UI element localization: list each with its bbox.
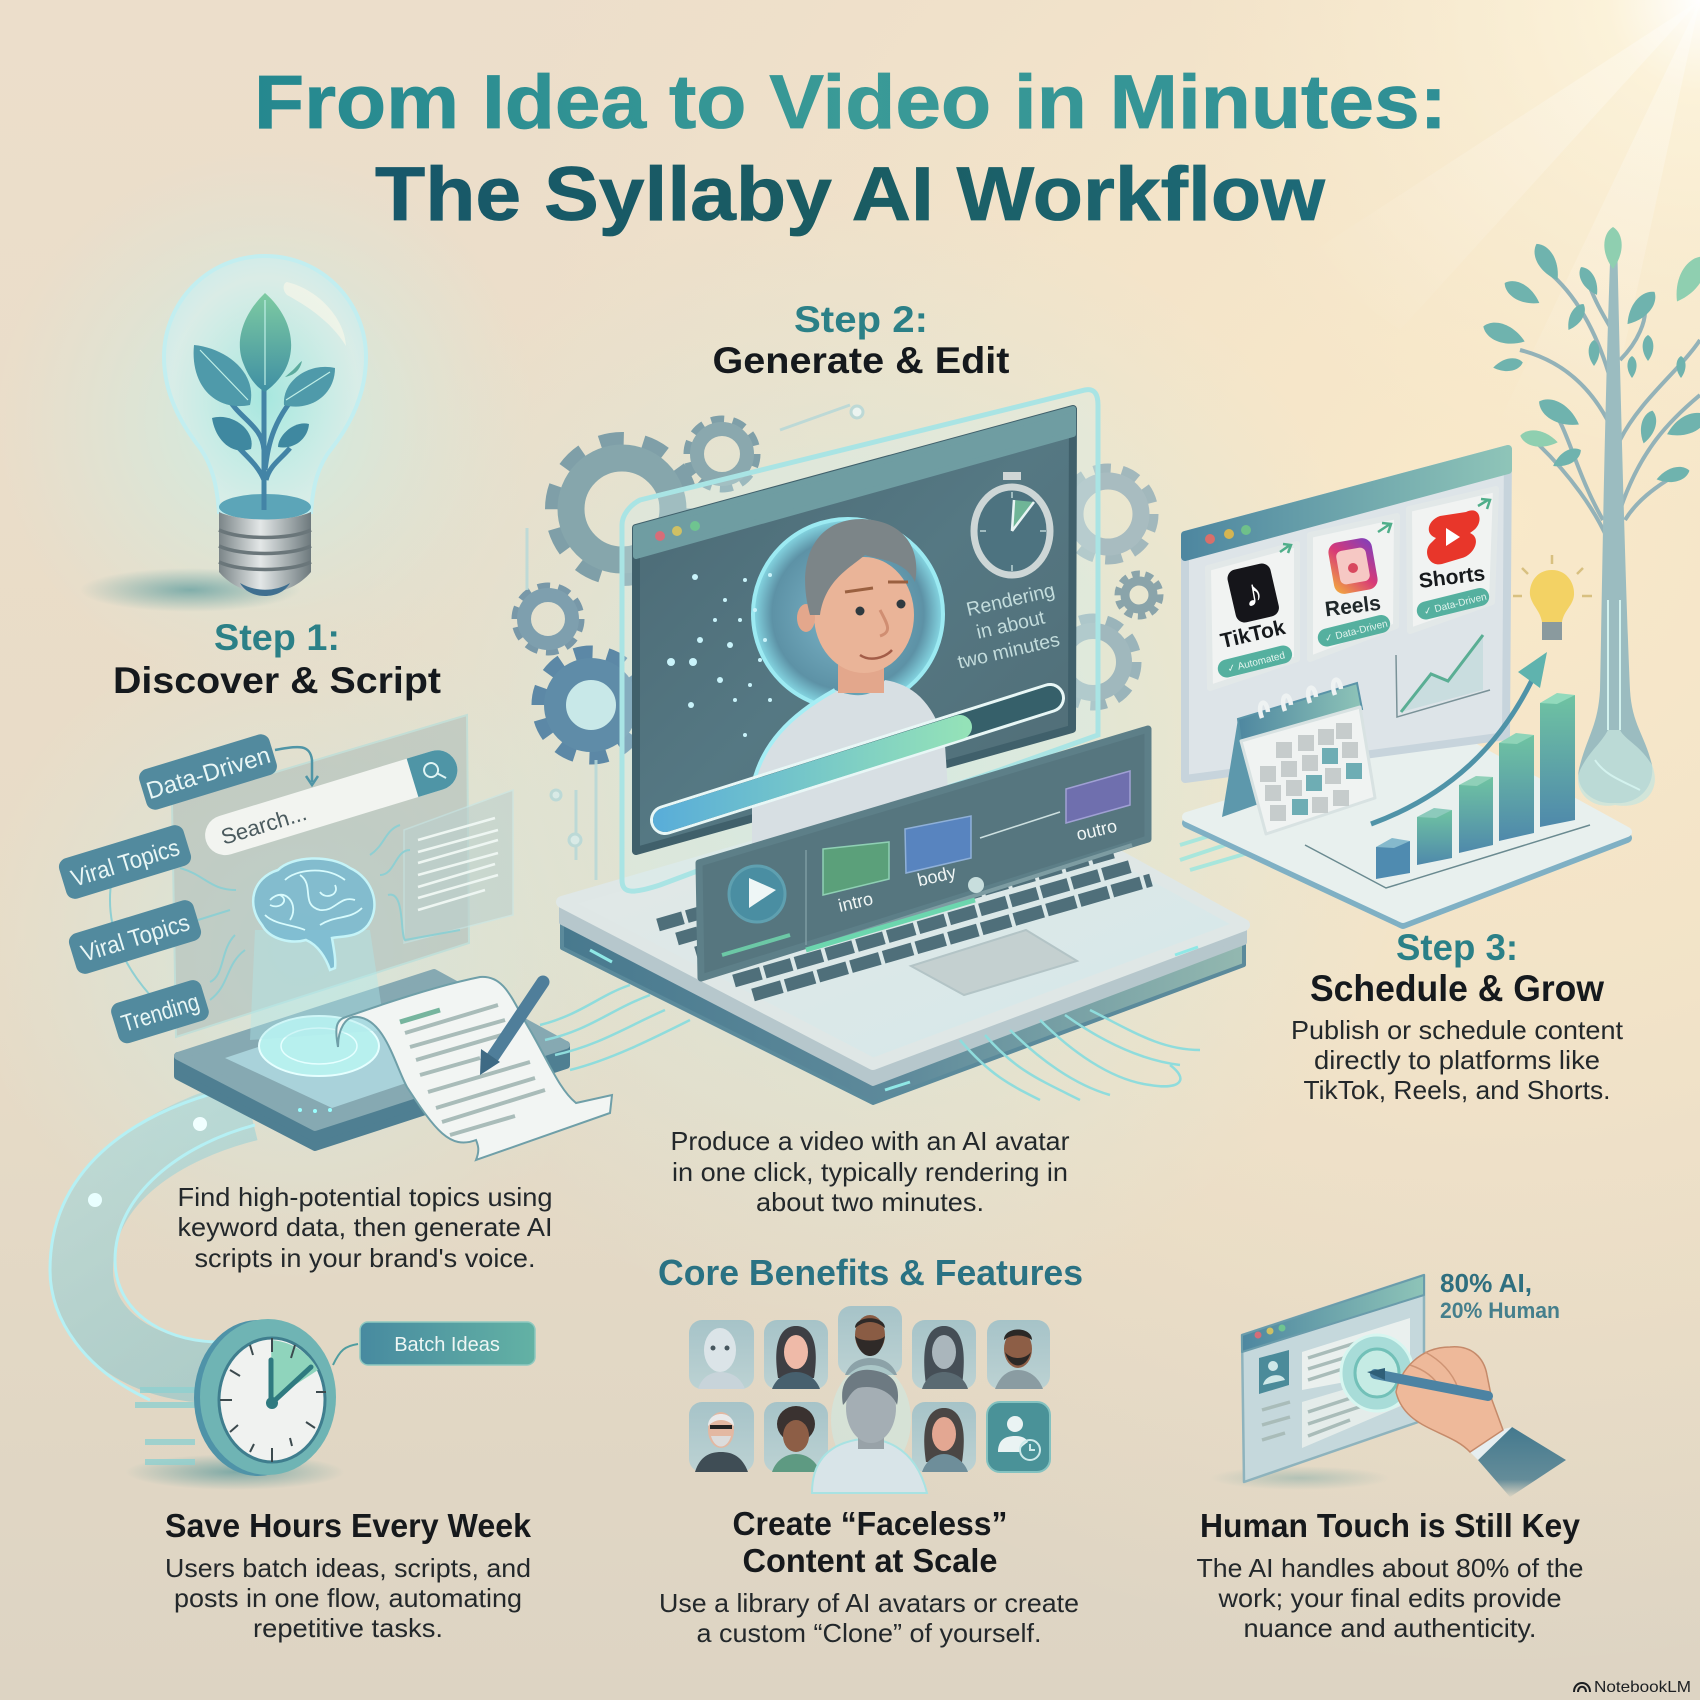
text: step 2 description: in one click, typically rendering in: [672, 1157, 1068, 1187]
avatar: older man: [689, 1402, 754, 1472]
trending pill: [109, 978, 211, 1046]
flow ribbon to clock: [50, 1090, 255, 1400]
line chart: [1396, 635, 1490, 717]
tiktok card: TikTok: [1218, 616, 1288, 653]
callout: 80/20: 80% AI,: [1440, 1268, 1532, 1298]
avatar grid: [689, 1306, 1050, 1493]
trackpad: [911, 930, 1077, 995]
title: From Idea to Video in Minutes:: [254, 60, 1447, 145]
outro clip: [1066, 771, 1130, 823]
avatar: curly hair: [764, 1402, 828, 1472]
connector to step 3: [1180, 825, 1265, 870]
plant stem: [226, 330, 305, 510]
rendering label: [955, 579, 1062, 674]
avatar: faceless figure: [812, 1365, 927, 1493]
timeline panel: outro: [1074, 816, 1119, 845]
text: human touch description: work; your final edits provide: [1217, 1583, 1562, 1613]
heading: save hours: Save Hours Every Week: [165, 1507, 532, 1544]
trending pill: Trending: [118, 989, 203, 1038]
keyboard: [658, 810, 1151, 995]
brain: [253, 858, 374, 970]
notebooklm watermark: NotebookLM: [1594, 1679, 1691, 1696]
calendar cells: [1260, 723, 1362, 821]
panel: discover illustration: [50, 715, 612, 1400]
text: step 2 description: about two minutes.: [756, 1187, 984, 1217]
heading: step 3: Step 3:: [1396, 927, 1518, 968]
panel: laptop illustration: [517, 390, 1265, 1103]
leaves: [240, 293, 291, 392]
glass frame: [622, 390, 1098, 891]
screw base: [219, 512, 311, 594]
avatar: gray woman: [912, 1320, 976, 1389]
text: step 2 description: Produce a video with an AI avatar: [670, 1126, 1070, 1156]
heading: faceless: Create “Faceless”: [732, 1505, 1008, 1542]
icon: light bulb with plant: [80, 256, 366, 612]
text: step 3 description: [1291, 1015, 1624, 1105]
icon: small light bulb: [1513, 555, 1592, 640]
callout: 80/20: [1440, 1268, 1560, 1323]
tiktok card: [1208, 544, 1297, 688]
heading: step 1: Step 1:: [214, 617, 340, 658]
text: step 3 description: directly to platforms like: [1314, 1045, 1600, 1075]
batch ideas button: Batch Ideas: [394, 1334, 500, 1356]
reels card: ✓ Data-Driven: [1324, 619, 1389, 645]
avatar: [752, 519, 950, 850]
text: faceless description: Use a library of AI avatars or create: [659, 1588, 1079, 1618]
text: step 3 description: Publish or schedule content: [1291, 1015, 1624, 1045]
text: save hours description: posts in one flow, automating: [174, 1583, 522, 1613]
heading: faceless: [732, 1505, 1008, 1579]
heading: step 3: Schedule & Grow: [1310, 968, 1604, 1009]
hand with pen: [1367, 1347, 1566, 1497]
avatar: bearded man: [838, 1306, 902, 1375]
text: step 1 description: [178, 1182, 552, 1273]
search bar: Search...: [218, 800, 310, 850]
timeline panel: intro: [836, 888, 875, 916]
heading: step 3: [1310, 927, 1604, 1009]
rendering label: Rendering: [964, 579, 1057, 621]
bar chart: [1376, 693, 1575, 879]
shorts card: Shorts: [1418, 562, 1486, 593]
heading: step 2: Step 2:: [794, 299, 928, 340]
growth arrow: [1371, 652, 1547, 824]
pen: [480, 982, 543, 1075]
batch ideas button: [360, 1322, 535, 1365]
intro clip: [823, 842, 889, 895]
data-driven pill: Data-Driven: [143, 742, 274, 805]
circuit traces: [540, 985, 1200, 1100]
tree leaves: [1480, 227, 1700, 486]
text: save hours description: repetitive tasks.: [253, 1613, 443, 1643]
avatar: woman: [764, 1320, 828, 1389]
heading: step 2: Generate & Edit: [712, 340, 1010, 381]
heading: step 1: Discover & Script: [113, 660, 441, 701]
timeline panel: [699, 729, 1148, 978]
icon: clock: [125, 1319, 345, 1490]
glass panel: [172, 715, 469, 1037]
script scroll: [336, 977, 612, 1160]
tiktok card: ♪: [1240, 572, 1266, 616]
icon: growth tree: [1480, 227, 1700, 806]
text: step 2 description: [670, 1126, 1070, 1217]
avatar: man: [987, 1320, 1050, 1389]
heading: core benefits: Core Benefits & Features: [658, 1252, 1083, 1293]
holographic beam: [250, 930, 385, 1040]
tiktok card: ✓ Automated: [1226, 650, 1286, 675]
viral topics pill: Viral Topics: [68, 834, 183, 893]
rendering label: in about: [974, 607, 1047, 644]
heading: step 2: [712, 299, 1010, 381]
rendering label: two minutes: [955, 629, 1062, 674]
body clip: [905, 816, 971, 873]
heading: human touch: Human Touch is Still Key: [1200, 1507, 1581, 1544]
icon: gears: [517, 421, 1160, 756]
panel: schedule illustration: [1185, 227, 1700, 924]
connector lines: [110, 825, 460, 1000]
icon: base platform: [178, 973, 566, 1147]
shorts card: [1409, 489, 1496, 631]
title: [254, 60, 1447, 237]
viral topics pill 2: Viral Topics: [78, 909, 193, 968]
reels card: Reels: [1324, 592, 1382, 621]
text: save hours description: [165, 1553, 531, 1643]
shorts card: ✓ Data-Driven: [1423, 592, 1488, 618]
stopwatch: [974, 472, 1050, 575]
callout: 80/20: 20% Human: [1440, 1298, 1560, 1323]
text: step 1 description: scripts in your brand's voice.: [194, 1243, 536, 1273]
play button: [729, 866, 785, 922]
connector arrow: [275, 747, 318, 785]
panel: faceless content: [659, 1306, 1079, 1648]
text: faceless description: a custom “Clone” of yourself.: [696, 1618, 1042, 1648]
calendar: [1222, 680, 1375, 834]
text: human touch description: [1196, 1553, 1584, 1643]
title: The Syllaby AI Workflow: [375, 152, 1326, 237]
panel: human touch: [1196, 1268, 1584, 1643]
avatar: clone icon: [987, 1402, 1050, 1472]
timeline panel: body: [915, 862, 958, 890]
text: step 1 description: keyword data, then generate AI: [178, 1212, 552, 1242]
text: step 3 description: TikTok, Reels, and Shorts.: [1304, 1075, 1610, 1105]
avatar: robot: [689, 1320, 754, 1389]
avatar: woman 2: [912, 1402, 976, 1472]
text: faceless description: [659, 1588, 1079, 1648]
laptop screen: [636, 409, 1073, 851]
window illustration: [1242, 1275, 1424, 1482]
window dots: [655, 531, 665, 541]
progress bar: [665, 698, 1050, 820]
particles: [667, 573, 772, 737]
laptop base: [562, 780, 1244, 1103]
platform: [1187, 736, 1627, 924]
heading: faceless: Content at Scale: [742, 1542, 998, 1579]
text: human touch description: The AI handles about 80% of the: [1196, 1553, 1584, 1583]
reels card: [1310, 516, 1397, 659]
heading: step 1: [113, 617, 441, 701]
search bar: [200, 745, 462, 860]
text: step 1 description: Find high-potential topics using: [178, 1182, 552, 1212]
side text panel: [404, 790, 513, 943]
browser window: [1185, 449, 1508, 779]
text: human touch description: nuance and authenticity.: [1244, 1613, 1536, 1643]
text: save hours description: Users batch ideas, scripts, and: [165, 1553, 531, 1583]
decorative sparks: [527, 405, 863, 880]
panel: save hours: [125, 1319, 535, 1643]
